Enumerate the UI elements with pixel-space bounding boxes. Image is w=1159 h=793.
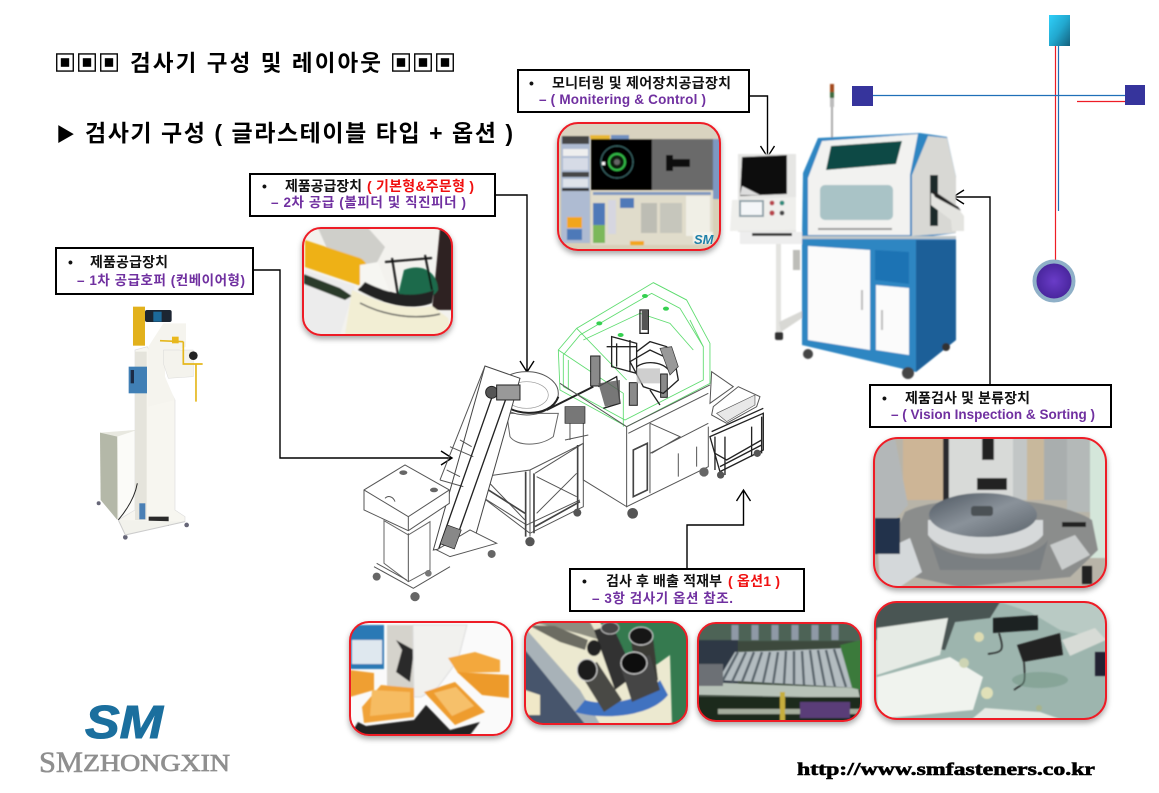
lower cabinet (802, 239, 956, 372)
illustration: main inspection machine cabinet (730, 84, 964, 379)
arrow: vision callout to main machine chute (953, 190, 990, 385)
photo: control software screen: SM (694, 232, 715, 247)
photo: bowl feeder closeup (303, 228, 452, 335)
illustration: primary hopper machine (97, 307, 203, 540)
website url: http://www.smfasteners.co.kr (797, 759, 1095, 779)
green transparent enclosure (558, 283, 710, 427)
callout: monitoring and control: • (529, 75, 534, 91)
callout: discharge stacking option: ( 옵션1 ) (728, 573, 780, 589)
logo: SM ZHONGXIN: SM (39, 746, 83, 779)
photo: packaged product stacking (350, 622, 512, 735)
callout: secondary supply (250, 174, 495, 216)
callout: primary supply hopper (56, 248, 253, 294)
callout: vision inspection and sorting: – ( Vision Inspection & Sorting ) (891, 407, 1095, 422)
logo: SM ZHONGXIN (39, 696, 230, 779)
arrow: primary supply callout to conveyor (253, 270, 452, 465)
title (54, 51, 456, 76)
callout: secondary supply: – 2차 공급 (볼피더 및 직진피더 ) (271, 195, 466, 210)
callout: monitoring and control: 모니터링 및 제어장치공급장치 (552, 75, 731, 91)
monitor and control panel (730, 154, 796, 232)
title: ▣▣▣ (390, 51, 456, 76)
photo: sorting plate with sensors (875, 602, 1106, 719)
machine table (560, 383, 710, 519)
bowl feeder on stand (473, 372, 588, 546)
subtitle: 검사기 구성 ( 글라스테이블 타입 + 옵션 ) (85, 120, 513, 146)
photo: control software screen (558, 123, 720, 250)
callout: discharge stacking option (570, 569, 804, 611)
callout: vision inspection and sorting (870, 385, 1111, 427)
decorative node graphic: cyan square, lines, blue squares and purple circle (852, 15, 1145, 300)
arrow: secondary supply callout to bowl feeder (495, 195, 534, 372)
photo: roller conveyor (698, 623, 861, 721)
inspection station (591, 310, 678, 408)
hopper box (364, 465, 450, 601)
callout: secondary supply: 제품공급장치 (285, 178, 362, 194)
callout: monitoring and control (518, 70, 749, 112)
callout: secondary supply: ( 기본형&주문형 ) (367, 178, 474, 194)
discharge stacking table (710, 372, 763, 479)
logo: SM ZHONGXIN: SM (85, 696, 165, 748)
photo: cylinder tubes (525, 622, 687, 724)
upper housing (802, 133, 964, 239)
callout: discharge stacking option: 검사 후 배출 적재부 (606, 573, 722, 589)
callout: discharge stacking option: • (582, 573, 587, 589)
callout: primary supply hopper: 제품공급장치 (90, 254, 168, 270)
subtitle: ▶ (56, 125, 75, 146)
casters (803, 343, 950, 379)
callout: vision inspection and sorting: • (882, 390, 887, 406)
title: 검사기 구성 및 레이아웃 (130, 51, 381, 76)
signal tower (830, 84, 834, 138)
callout: primary supply hopper: • (68, 254, 73, 270)
callout: vision inspection and sorting: 제품검사 및 분류장치 (905, 390, 1030, 406)
bowl feeder linear track (547, 387, 593, 410)
callout: monitoring and control: – ( Monitering & Control ) (539, 92, 706, 107)
arrow: discharge callout to stacking table (687, 490, 750, 569)
arrow: monitoring callout to monitor (749, 96, 774, 157)
monitor stand (740, 232, 802, 340)
inclined conveyor (433, 366, 520, 558)
title: ▣▣▣ (54, 51, 120, 76)
callout: primary supply hopper: – 1차 공급호퍼 (컨베이어형) (77, 273, 245, 288)
photo: vision inspection index table (874, 438, 1106, 587)
logo: SM ZHONGXIN: ZHONGXIN (83, 751, 230, 777)
callout: secondary supply: • (262, 178, 267, 194)
callout: discharge stacking option: – 3항 검사기 옵션 참조. (592, 591, 733, 606)
illustration: line drawing of inspection system (364, 283, 763, 601)
